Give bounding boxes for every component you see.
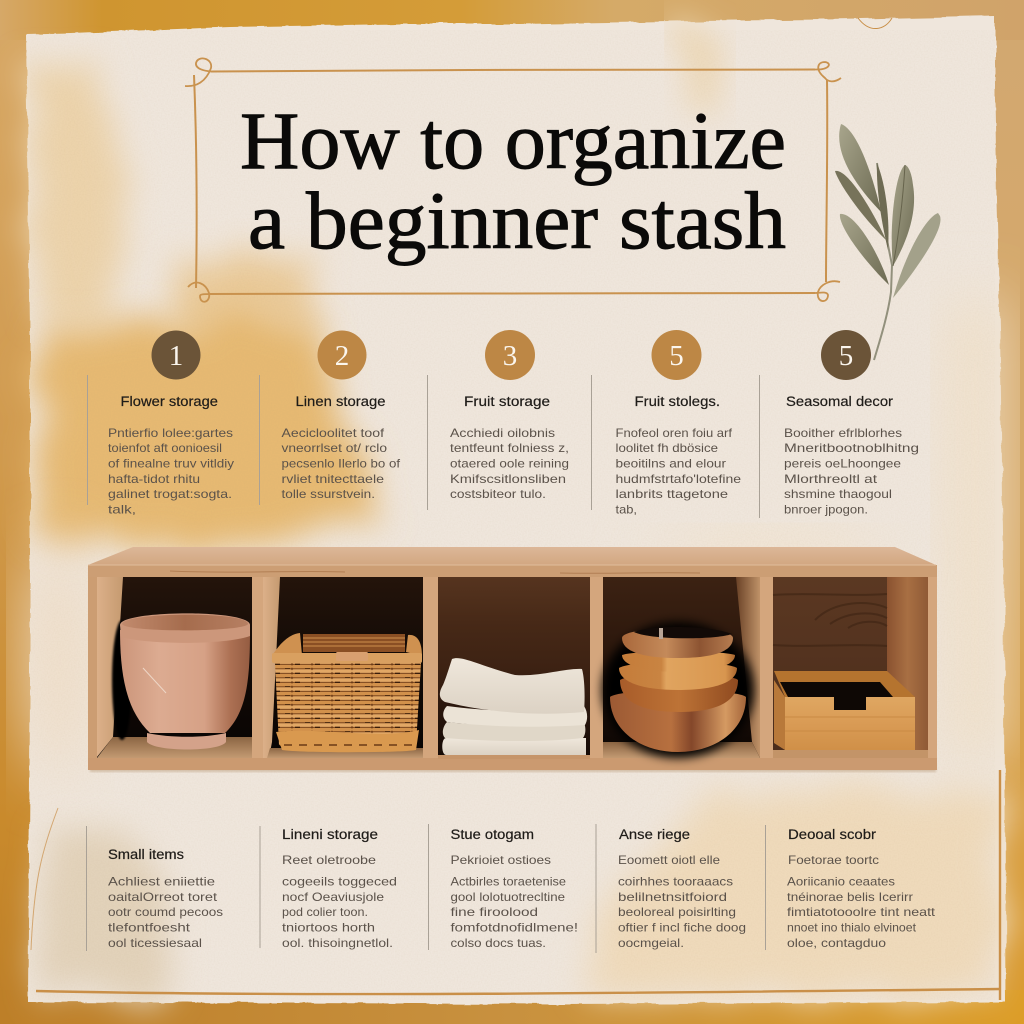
column 4: beoloreal poisirlting (618, 905, 736, 919)
column 3: Stue otogam (450, 827, 534, 842)
step 1 (88, 330, 234, 516)
column 2: tniortoos horth (282, 920, 375, 934)
step 3: Kmifscsitlonsliben (450, 472, 566, 486)
column 5: oloe, contagduo (787, 936, 886, 950)
column 4: oftier f incl fiche doog (618, 920, 746, 934)
column 1: oaitalOrreot toret (108, 890, 218, 904)
compartment 5 (773, 577, 937, 758)
step 2: 2 (335, 340, 349, 372)
step 3: Acchiedi oilobnis (450, 426, 555, 440)
divider 3 (590, 577, 603, 758)
column 5: fimtiatotooolre tint neatt (787, 905, 936, 919)
step 5: Mlorthreoltl at (784, 472, 878, 486)
divider 1 (252, 577, 263, 758)
step 2: pecsenlo Ilerlo bo of (282, 456, 401, 470)
step 2: Linen storage (296, 394, 386, 409)
step 1: talk, (108, 502, 136, 516)
column 3: Pekrioiet ostioes (450, 853, 551, 867)
item: folded linen stack (440, 658, 587, 755)
step 4: hudmfstrtafo'lotefine (616, 472, 741, 486)
item: bamboo box (774, 671, 915, 750)
column 3: gool lolotuotrecltine (450, 890, 565, 904)
compartment 4 (602, 577, 760, 758)
column 4: belilnetnsitfoiord (618, 890, 727, 904)
steps row: bottom (86, 824, 936, 953)
column 1: ootr coumd pecoos (108, 905, 223, 919)
column 3: Actbirles toraetenise (450, 874, 566, 888)
compartment 2 (263, 577, 423, 758)
column 4: coirhhes tooraaacs (618, 874, 733, 888)
step 3: tentfeunt folniess z, (450, 441, 569, 455)
step 1: of finealne truv vitldiy (108, 456, 234, 470)
step 1: Flower storage (120, 394, 218, 409)
column 2: ool. thisoingnetlol. (282, 936, 393, 950)
column 1: Achliest eniiettie (108, 874, 215, 888)
step 5 (760, 330, 919, 518)
step 2: tolle ssurstvein. (282, 487, 375, 501)
step 1: galinet trogat:sogta. (108, 487, 232, 501)
step 4 (592, 330, 741, 516)
column 3 (428, 824, 578, 950)
step 5: Booither efrlblorhes (784, 426, 902, 440)
column 3: fomfotdnofidlmene! (450, 920, 578, 934)
column 5: nnoet ino thialo elvinoet (787, 920, 917, 934)
column 2: nocf Oeaviusjole (282, 890, 384, 904)
step 5: 5 (839, 340, 853, 372)
divider 2 (423, 577, 438, 758)
column 2: pod colier toon. (282, 905, 368, 919)
item: stacked wooden bowls (610, 627, 746, 752)
step 1: toienfot aft oonioesil (108, 441, 222, 455)
step 4: Fnofeol oren foiu arf (616, 426, 733, 440)
divider 4 (760, 577, 773, 758)
step 2: vneorrlset ot/ rclo (282, 441, 387, 455)
title: a beginner stash (248, 175, 786, 266)
step 3: Fruit storage (464, 394, 550, 409)
step 4: 5 (669, 340, 684, 372)
steps row: top (88, 330, 919, 518)
step 1: Pntierfio lolee:gartes (108, 426, 233, 440)
compartment 1 (97, 577, 252, 758)
title (240, 95, 786, 266)
column 4: Anse riege (619, 827, 690, 842)
column 2 (260, 826, 397, 950)
compartment 3 (438, 577, 590, 759)
step 3: otaered oole reining (450, 456, 569, 470)
step 4: tab, (616, 502, 637, 516)
column 4 (596, 824, 746, 953)
step 3: costsbiteor tulo. (450, 487, 546, 501)
step 4: lanbrits ttagetone (616, 487, 728, 501)
title: How to organize (240, 95, 786, 186)
step 2: rvliet tnitecttaele (282, 472, 384, 486)
step 3: 3 (503, 340, 517, 372)
step 5: Seasomal decor (786, 394, 894, 409)
step 1: 1 (169, 340, 183, 372)
step 2: Aecicloolitet toof (282, 426, 385, 440)
column 1: tlefontfoesht (108, 920, 191, 934)
shelf unit (88, 547, 937, 772)
step 4: beoitilns and elour (616, 456, 726, 470)
step 2 (260, 330, 401, 505)
step 3 (428, 330, 569, 510)
column 2: Reet oletroobe (282, 853, 376, 867)
step 4: loolitet fh dbösice (616, 441, 718, 455)
icon: olive sprig (835, 124, 941, 360)
column 4: oocmgeial. (618, 936, 684, 950)
step 5: bnroer jpogon. (784, 502, 868, 516)
column 5: Foetorae toortc (788, 853, 879, 867)
step 1: hafta-tidot rhitu (108, 472, 200, 486)
column 5: Aoriicanio ceaates (787, 874, 895, 888)
step 5: Mneritbootnoblhitng (784, 441, 919, 455)
title frame (185, 58, 841, 302)
step 4: Fruit stolegs. (634, 394, 720, 409)
step 5: shsmine thaogoul (784, 487, 892, 501)
column 3: colso docs tuas. (450, 936, 546, 950)
shelf carcass (88, 547, 937, 772)
column 3: fine firoolood (450, 905, 538, 919)
column 4: Eoomett oiotl elle (618, 853, 720, 867)
column 1: Small items (108, 847, 184, 862)
item: terracotta pot (120, 613, 250, 750)
column 5: tnéinorae belis Icerirr (787, 890, 913, 904)
step 5: pereis oeLhoongee (784, 456, 901, 470)
column 1 (86, 826, 223, 951)
item: wicker basket (272, 633, 422, 752)
column 5 (766, 825, 936, 950)
column 2: Lineni storage (282, 827, 378, 842)
column 1: ool ticessiesaal (108, 936, 202, 950)
column 2: cogeeils toggeced (282, 874, 397, 888)
column 5: Deooal scobr (788, 827, 877, 842)
